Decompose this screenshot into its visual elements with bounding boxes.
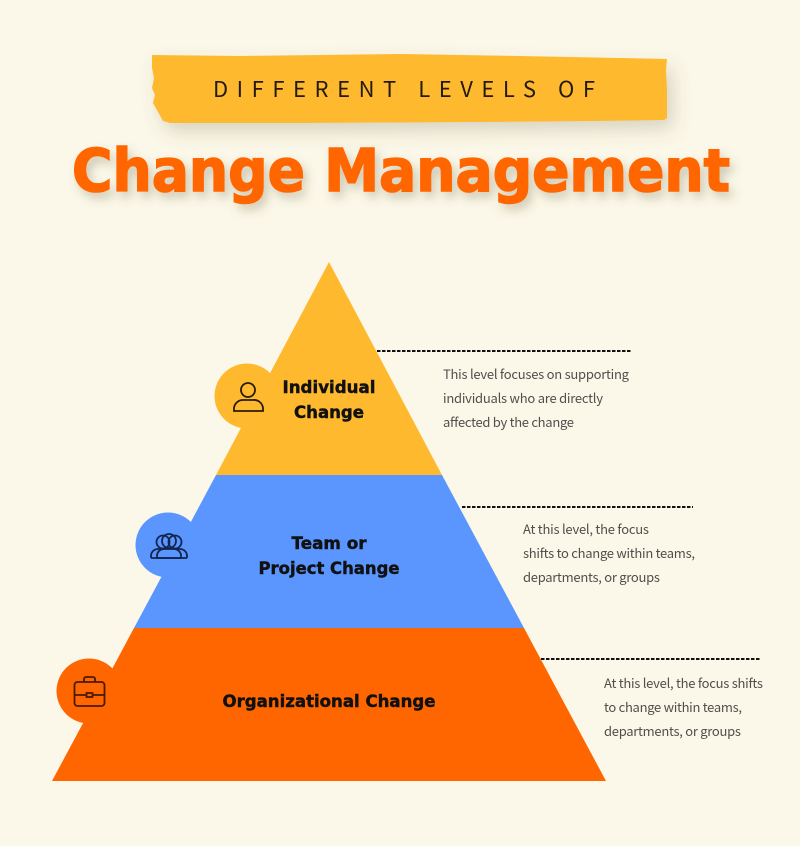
label: organizational change: Organizational Change	[222, 692, 436, 712]
description: organization: to change within teams,	[604, 697, 742, 716]
tier: individual change	[214, 262, 442, 475]
description: individual: This level focuses on supporting	[443, 364, 630, 383]
description: team: departments, or groups	[523, 567, 660, 586]
icon: briefcase	[74, 677, 104, 706]
icon: person	[234, 383, 263, 411]
tier: team or project change	[134, 475, 524, 628]
description: team: At this level, the focus	[523, 519, 649, 538]
banner text: DIFFERENT LEVELS OF	[213, 72, 595, 104]
description: organization	[604, 673, 763, 740]
tier: organizational change	[52, 628, 606, 781]
title banner	[152, 54, 667, 123]
description: organization: At this level, the focus shifts	[604, 673, 763, 692]
description: individual: individuals who are directly	[443, 388, 603, 407]
label: individual change: Individual	[282, 378, 376, 398]
label: individual change	[282, 378, 376, 423]
label: team or project change: Project Change	[258, 559, 400, 579]
description: individual: affected by the change	[443, 412, 574, 431]
description: organization: departments, or groups	[604, 721, 741, 740]
label: team or project change: Team or	[292, 534, 367, 554]
callout: organization	[541, 659, 763, 740]
main title: Change Management	[72, 136, 730, 205]
callout: individual	[377, 351, 632, 431]
callout: team	[462, 507, 695, 586]
description: individual	[443, 364, 630, 431]
description: team	[523, 519, 695, 586]
icon: team	[151, 534, 187, 558]
label: team or project change	[258, 534, 400, 579]
pyramid	[52, 262, 606, 781]
description: team: shifts to change within teams,	[523, 543, 695, 562]
label: individual change: Change	[294, 403, 364, 423]
